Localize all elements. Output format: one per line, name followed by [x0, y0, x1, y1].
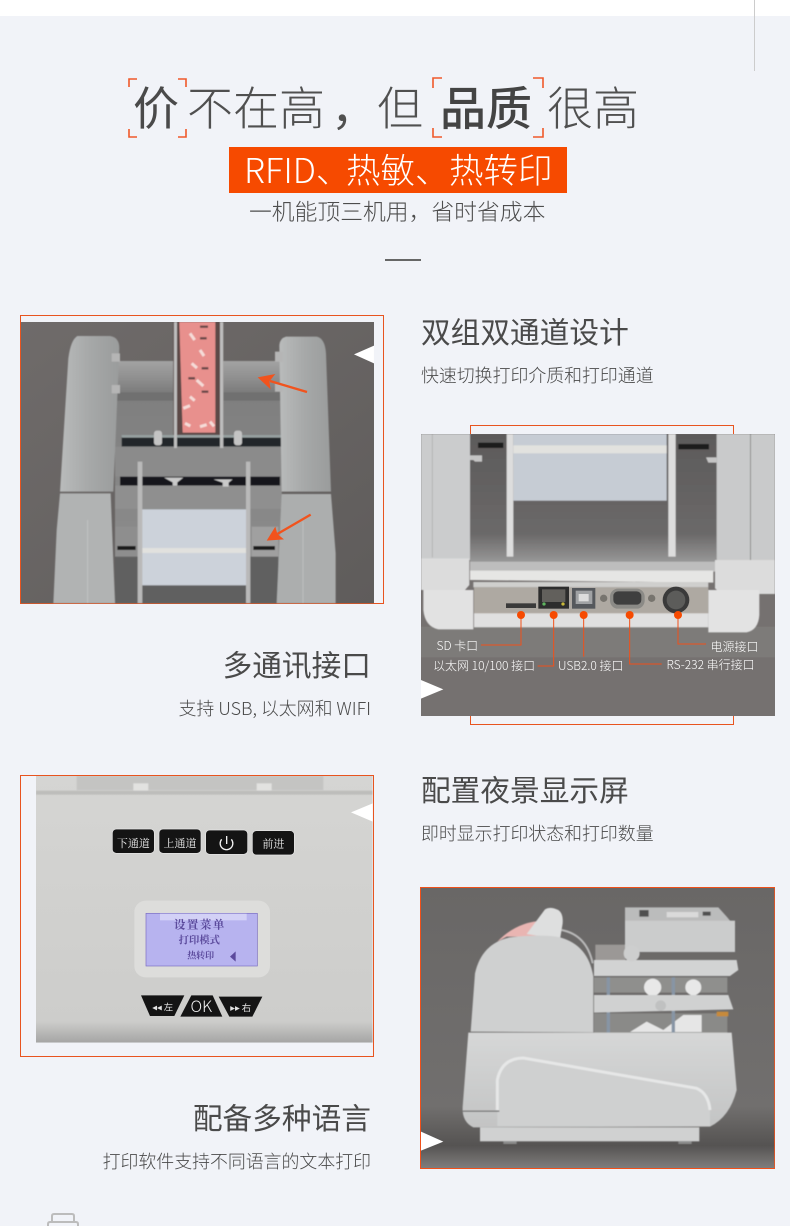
base body	[463, 1033, 737, 1127]
icon: printer	[48, 1214, 78, 1226]
orange subtitle banner: 热转印	[449, 143, 552, 193]
title text: very high: 很高	[547, 73, 639, 139]
white notch	[421, 680, 443, 699]
heading: backlit display: 配置夜景显示屏	[421, 767, 629, 810]
orange subtitle banner	[229, 143, 567, 193]
title text: comma: ，	[331, 73, 377, 139]
panel: ports photo	[421, 426, 775, 724]
port labels: 电源接口	[710, 638, 759, 655]
title text: price: 价	[133, 73, 179, 139]
spool housing	[471, 936, 593, 1032]
white notch	[354, 346, 374, 363]
port labels: RS-232 串行接口	[666, 656, 755, 673]
title brackets: quality	[433, 78, 543, 137]
title text: quality: 品质	[440, 73, 532, 139]
heading: communication interfaces: 多通讯接口	[223, 642, 371, 685]
buttons: bottom row: ▸▸ 右	[230, 1000, 251, 1014]
port: SD slot	[506, 603, 536, 608]
description: dual group channel: 快速切换打印介质和打印通道	[421, 362, 654, 388]
white notch	[351, 803, 373, 822]
buttons: bottom row: ◂◂ 左	[152, 1000, 173, 1014]
description: multiple languages: 打印软件支持不同语言的文本打印	[103, 1148, 371, 1174]
port labels: 以太网 10/100 接口	[433, 657, 535, 674]
buttons: top row: 上通道	[164, 835, 196, 851]
top cover	[624, 906, 730, 922]
buttons: top row: 下通道	[117, 835, 150, 851]
buttons: bottom row: OK	[191, 993, 212, 1017]
port labels: SD 卡口	[436, 637, 478, 654]
port labels	[433, 637, 759, 674]
heading: dual group channel: 双组双通道设计	[421, 309, 629, 352]
port: power	[663, 587, 689, 613]
LCD screen: 打印模式	[179, 931, 221, 946]
callout lines and dots	[481, 615, 706, 666]
top white strip	[0, 0, 790, 16]
icon: arrow to lower roller	[267, 515, 311, 541]
LCD screen	[134, 901, 270, 977]
buttons: bottom row	[141, 993, 262, 1017]
port: ethernet	[538, 587, 569, 609]
title text: but: 但	[377, 73, 423, 139]
orange subtitle banner: 热敏、	[346, 143, 450, 193]
foot	[480, 1127, 699, 1141]
LCD screen: 热转印	[187, 949, 214, 962]
pink label roll	[498, 920, 537, 942]
title text: not high: 不在高	[187, 73, 325, 139]
white notch	[421, 1132, 443, 1151]
port labels: USB2.0 接口	[558, 657, 624, 674]
upper tray	[595, 945, 625, 961]
title brackets: price	[129, 79, 186, 137]
orange subtitle banner: RFID、	[244, 143, 350, 193]
port: USB	[572, 588, 595, 609]
buttons: top row: 前进	[262, 836, 284, 852]
title	[129, 73, 639, 139]
port: serial	[600, 589, 655, 609]
panel: control panel photo	[20, 776, 374, 1056]
lower tray	[594, 995, 733, 1013]
buttons: top row	[112, 829, 294, 855]
print mechanism shadows	[594, 977, 727, 993]
description: backlit display: 即时显示打印状态和打印数量	[421, 820, 654, 846]
tagline: 一机能顶三机用，省时省成本	[249, 194, 545, 227]
panel: side view photo	[420, 888, 774, 1168]
icon: arrow to upper roller	[258, 374, 307, 392]
LCD screen: 设置菜单	[174, 916, 226, 932]
panel: dual channel photo	[20, 316, 384, 604]
heading: multiple languages: 配备多种语言	[193, 1095, 371, 1138]
guide arm	[527, 908, 563, 939]
description: communication interfaces: 支持 USB, 以太网和 WIFI	[178, 695, 371, 721]
